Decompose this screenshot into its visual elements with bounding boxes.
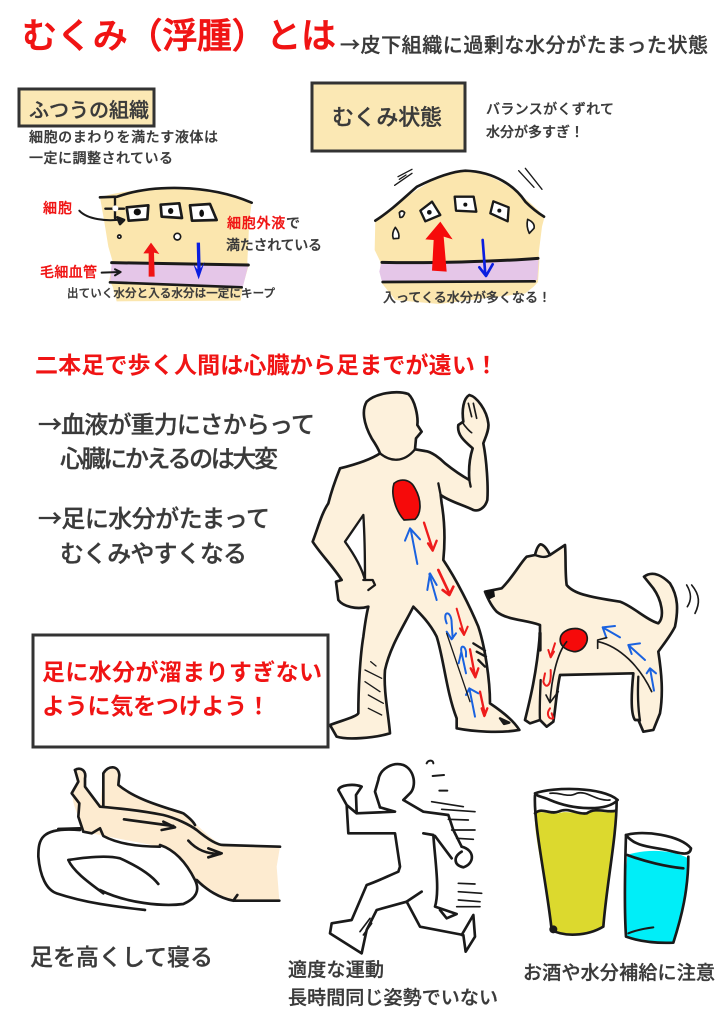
callout: advice box bbox=[33, 635, 328, 747]
text: blood against gravity: →血液が重力にさからって bbox=[38, 405, 315, 440]
label: alcohol and hydration: お酒や水分補給に注意 bbox=[523, 962, 715, 984]
callout: advice box: ように気をつけよう！ bbox=[42, 693, 270, 719]
text: water accumulates bbox=[38, 499, 270, 568]
illustration: human figure bbox=[313, 392, 519, 738]
icon: water glass bbox=[625, 833, 691, 943]
text: blood against gravity bbox=[38, 405, 315, 473]
title: むくみ（浮腫）とは bbox=[22, 17, 336, 56]
heading: bipedal: 二本足で歩く人間は心臓から足までが遠い！ bbox=[35, 352, 498, 378]
label: moderate exercise: 長時間同じ姿勢でいない bbox=[288, 987, 498, 1009]
label: extracellular fluid: 細胞外液で bbox=[227, 215, 300, 231]
label: extracellular fluid bbox=[226, 215, 322, 253]
caption: normal tissue: 出ていく水分と入る水分は一定にキープ bbox=[67, 286, 276, 300]
icon: dog heart bbox=[560, 629, 587, 652]
panel: normal tissue label: ふつうの組織 bbox=[29, 99, 149, 122]
label: capillary: 毛細血管 bbox=[40, 264, 97, 280]
label: moderate exercise bbox=[288, 959, 498, 1009]
text: swollen description: バランスがくずれて bbox=[486, 101, 614, 117]
text: swollen description bbox=[486, 101, 614, 140]
callout: advice box: 足に水分が溜まりすぎない bbox=[42, 659, 322, 685]
label: raise feet: 足を高くして寝る bbox=[30, 944, 213, 970]
illustration: running figure bbox=[330, 761, 482, 953]
text: swollen description: 水分が多すぎ！ bbox=[486, 124, 584, 140]
label: moderate exercise: 適度な運動 bbox=[288, 959, 384, 981]
illustration: legs on pillow bbox=[38, 767, 280, 910]
text: water accumulates: むくみやすくなる bbox=[60, 541, 247, 568]
panel: swollen state label: むくみ状態 bbox=[332, 105, 442, 130]
text: normal tissue description: 細胞のまわりを満たす液体は bbox=[29, 129, 218, 145]
panel: normal tissue label bbox=[19, 89, 154, 126]
label: extracellular fluid: 満たされている bbox=[226, 237, 322, 253]
text: blood against gravity: 心臓にかえるのは大変 bbox=[60, 446, 278, 473]
diagram: normal tissue bbox=[79, 188, 252, 301]
illustration: dog bbox=[485, 544, 698, 732]
subtitle: →皮下組織に過剰な水分がたまった状態 bbox=[340, 29, 708, 58]
text: normal tissue description: 一定に調整されている bbox=[29, 150, 173, 166]
label: cell: 細胞 bbox=[43, 200, 72, 216]
diagram: swollen tissue bbox=[375, 168, 545, 304]
icon: beer glass bbox=[535, 789, 618, 935]
caption: swollen tissue: 入ってくる水分が多くなる！ bbox=[383, 290, 551, 305]
icon: heart bbox=[393, 480, 420, 520]
text: normal tissue description bbox=[29, 129, 218, 166]
panel: swollen state label bbox=[312, 83, 465, 151]
text: water accumulates: →足に水分がたまって bbox=[38, 499, 270, 534]
